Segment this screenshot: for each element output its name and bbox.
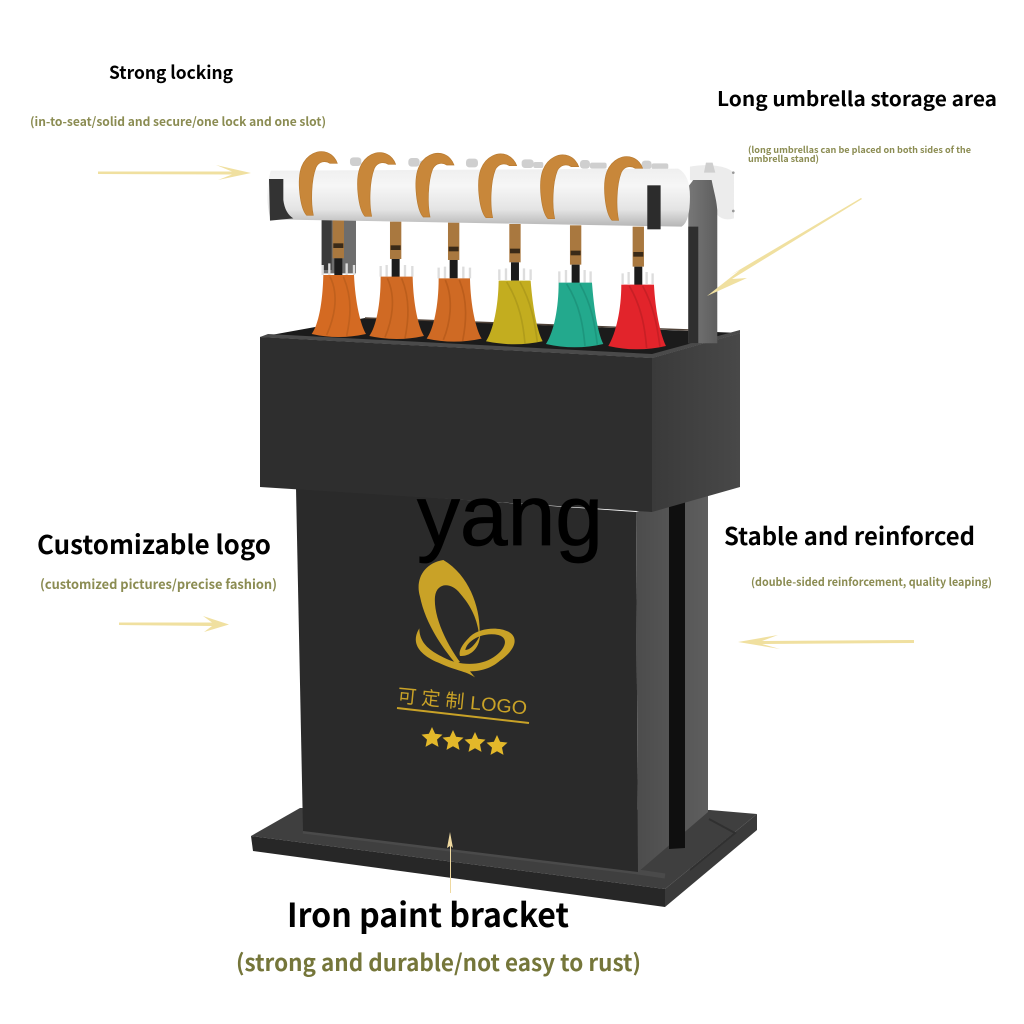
umbrella 1 orange bbox=[312, 220, 366, 337]
heading: Strong locking bbox=[109, 59, 233, 85]
umbrella 2 orange bbox=[369, 222, 424, 339]
arrow bbox=[119, 616, 229, 632]
label: strong locking bbox=[30, 59, 326, 180]
knobs on the bar bbox=[350, 157, 668, 169]
logo caption: 制 bbox=[444, 690, 465, 713]
pedestal bbox=[296, 488, 708, 872]
label: stable and reinforced bbox=[724, 517, 992, 649]
four stars bbox=[422, 727, 508, 755]
umbrella 3 orange bbox=[427, 223, 482, 342]
description: (strong and durable/not easy to rust) bbox=[236, 944, 641, 978]
umbrella 6 red bbox=[608, 227, 666, 349]
label: iron paint bracket bbox=[236, 832, 641, 978]
left bracket bbox=[269, 179, 293, 221]
arrow bbox=[98, 165, 251, 180]
base plate bbox=[251, 808, 757, 907]
umbrella 5 teal bbox=[546, 225, 603, 347]
description: (double-sided reinforcement, quality leaping) bbox=[751, 574, 992, 590]
heading: Iron paint bracket bbox=[287, 889, 569, 937]
upper rack with umbrellas bbox=[267, 152, 735, 349]
customizable logo bbox=[397, 560, 529, 755]
heading: Customizable logo bbox=[37, 525, 271, 562]
arrow bbox=[447, 832, 453, 893]
description: umbrella stand) bbox=[748, 152, 819, 165]
logo swirl bbox=[416, 560, 515, 677]
heading: Long umbrella storage area bbox=[717, 83, 997, 112]
right post bbox=[688, 163, 735, 343]
logo caption: 定 bbox=[420, 687, 441, 711]
umbrella 4 yellow bbox=[486, 224, 543, 344]
description: (customized pictures/precise fashion) bbox=[40, 574, 277, 593]
description: (long umbrellas can be placed on both sides of the bbox=[748, 143, 971, 156]
logo caption: LOGO bbox=[469, 693, 528, 719]
logo underline bbox=[397, 708, 529, 723]
umbrellas bbox=[312, 220, 666, 349]
logo caption: 可 bbox=[397, 686, 417, 709]
umbrella stand product bbox=[251, 152, 757, 907]
watermark: yang bbox=[417, 468, 603, 564]
white cylinder bar bbox=[267, 169, 690, 227]
umbrella hook rings bbox=[299, 152, 643, 220]
arrow bbox=[738, 635, 914, 649]
description: (in-to-seat/solid and secure/one lock and one slot) bbox=[30, 113, 326, 130]
arrow bbox=[707, 198, 862, 296]
label: long umbrella storage bbox=[707, 83, 997, 296]
label: customizable logo bbox=[37, 525, 277, 632]
right bracket bbox=[647, 185, 661, 229]
heading: Stable and reinforced bbox=[724, 517, 975, 552]
upper box bbox=[260, 318, 740, 512]
left post bbox=[322, 220, 356, 273]
